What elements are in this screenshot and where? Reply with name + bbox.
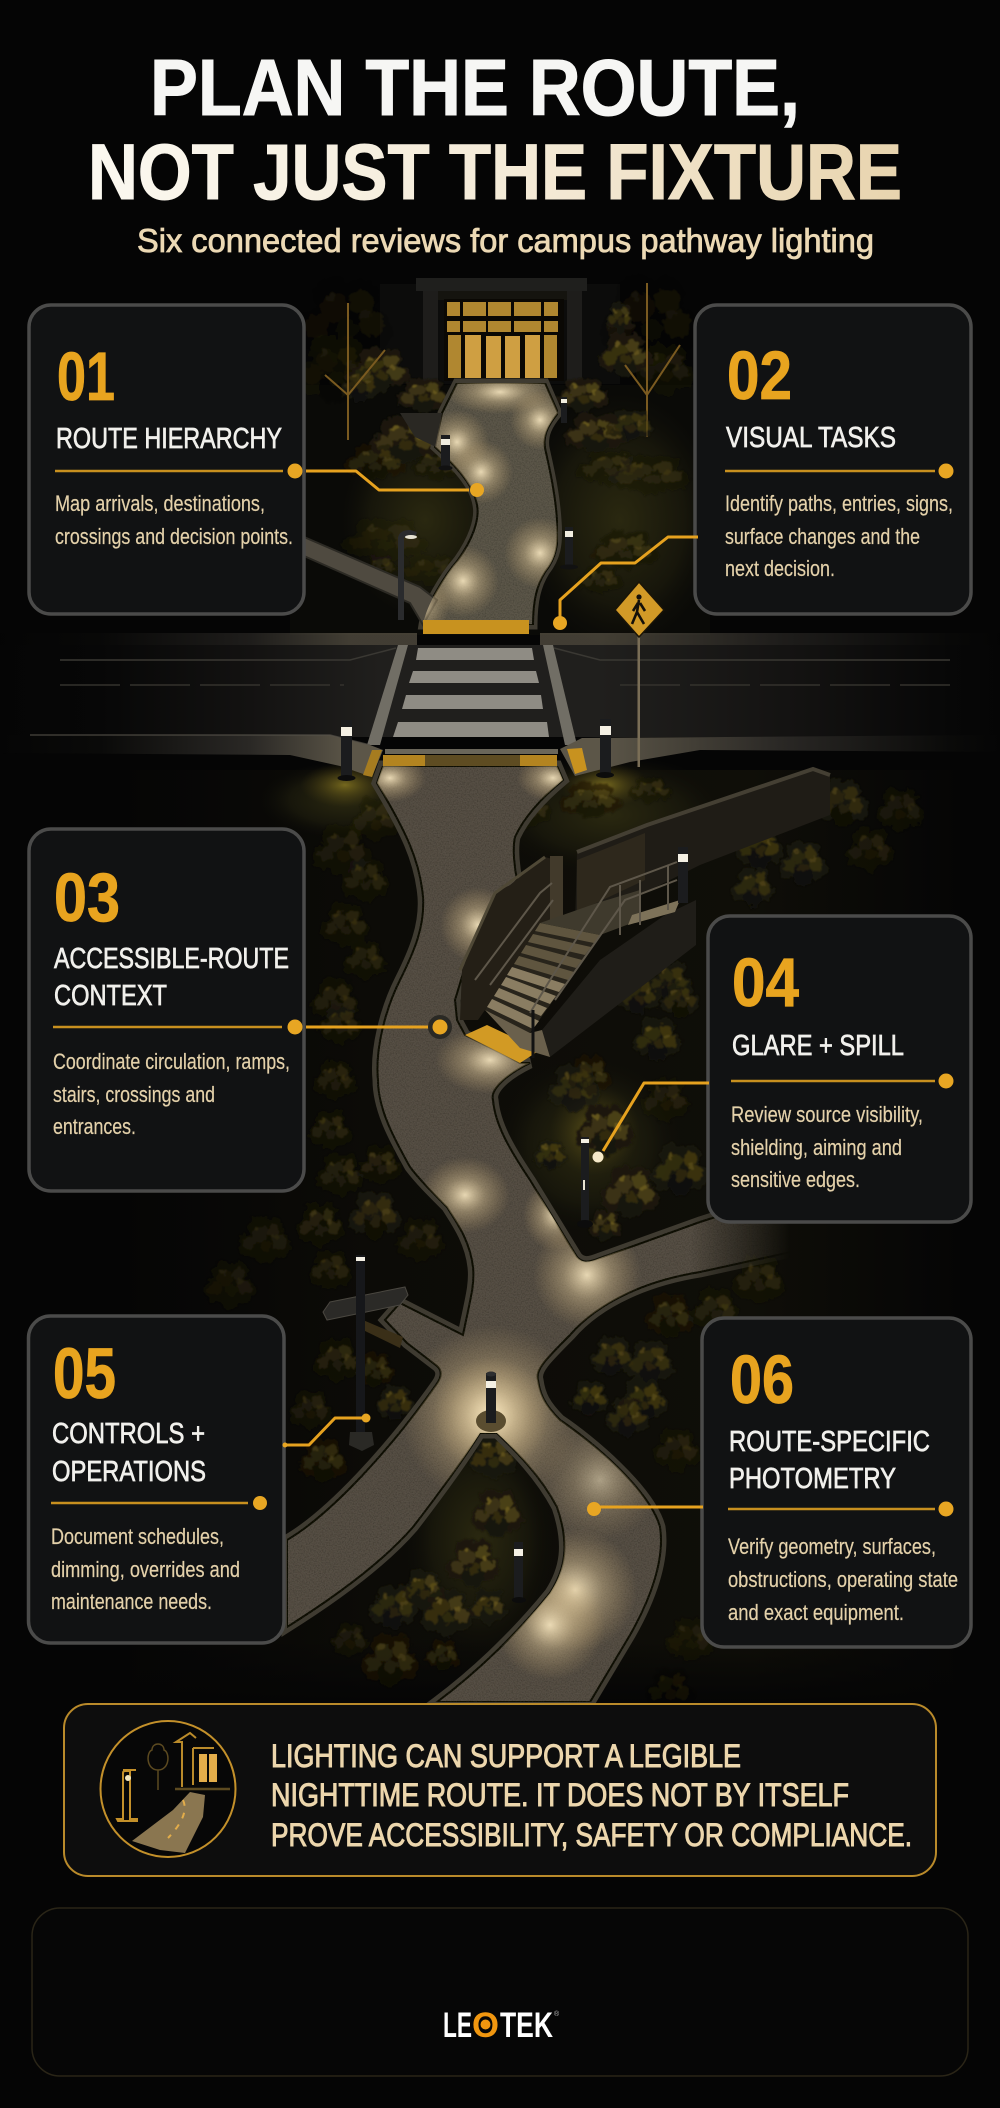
panel 01: route hierarchy: crossings and decision points.	[55, 524, 293, 549]
title: NOT JUST THE FIXTURE	[88, 127, 902, 216]
panel 02: visual tasks	[695, 305, 971, 614]
stairs, railings and retaining wall	[460, 769, 830, 1058]
connector: panel 01 to route	[306, 471, 484, 497]
panel 02: visual tasks: 02	[727, 337, 792, 414]
heading	[88, 43, 902, 259]
panel 03: accessible-route context: stairs, crossings and	[53, 1082, 215, 1107]
panel 04: glare and spill: GLARE + SPILL	[732, 1030, 904, 1062]
panel 05: controls and operations	[28, 1316, 284, 1643]
panel 06: route-specific photometry: ROUTE-SPECIFIC	[729, 1426, 930, 1458]
panel 03: accessible-route context: ACCESSIBLE-ROUTE	[54, 943, 289, 975]
panel 06: route-specific photometry: Verify geometry, surfaces,	[728, 1534, 936, 1559]
panel 03: accessible-route context: Coordinate circulation, ramps,	[53, 1049, 290, 1074]
panel 05: controls and operations: Document schedules,	[51, 1524, 224, 1549]
panel 03: accessible-route context	[29, 829, 304, 1191]
pedestrian crossing sign	[615, 582, 664, 767]
panel 06: route-specific photometry: and exact equipment.	[728, 1600, 904, 1625]
caveat statement: NIGHTTIME ROUTE. IT DOES NOT BY ITSELF	[271, 1777, 849, 1813]
connector: panel 04 to pole light	[592, 1083, 709, 1162]
connector: panel 06 to walkway	[587, 1502, 703, 1516]
panel 05: controls and operations: maintenance needs.	[51, 1589, 212, 1614]
title	[88, 43, 902, 216]
panel 02: visual tasks: VISUAL TASKS	[726, 422, 896, 454]
panel 05: controls and operations: 05	[53, 1335, 116, 1414]
caveat statement: LIGHTING CAN SUPPORT A LEGIBLE	[271, 1738, 741, 1774]
campus building	[380, 278, 620, 384]
logo: LEOTEK: O	[472, 2006, 499, 2045]
panel 03: accessible-route context: CONTEXT	[54, 980, 167, 1012]
title: PLAN THE ROUTE,	[150, 43, 800, 132]
logo: LEOTEK: ®	[554, 2010, 560, 2018]
panel 02: visual tasks: Identify paths, entries, signs,	[725, 491, 953, 516]
panel 06: route-specific photometry	[702, 1318, 971, 1647]
panel 02: visual tasks: surface changes and the	[725, 524, 920, 549]
pathway bollards and pole lights	[338, 397, 688, 1603]
street and crosswalk	[0, 633, 1000, 777]
shrubs and planting beds	[204, 377, 924, 1712]
panel 01: route hierarchy: 01	[57, 338, 115, 415]
scene: illustrated campus route at night	[0, 274, 1000, 1712]
panel 06: route-specific photometry: obstructions, operating state	[728, 1567, 958, 1592]
panel 03: accessible-route context: entrances.	[53, 1114, 136, 1139]
caveat statement	[271, 1738, 912, 1853]
panel 06: route-specific photometry: 06	[730, 1341, 794, 1418]
tactile warning surfaces	[363, 620, 587, 1063]
panel 01: route hierarchy	[29, 305, 304, 614]
panel 05: controls and operations: dimming, overrides and	[51, 1557, 240, 1582]
panel 04: glare and spill: 04	[732, 944, 799, 1021]
panel 04: glare and spill	[708, 916, 971, 1222]
panel 04: glare and spill: Review source visibility,	[731, 1102, 923, 1127]
panel 02: visual tasks: next decision.	[725, 556, 835, 581]
footer panel	[32, 1908, 968, 2076]
panel 06: route-specific photometry: PHOTOMETRY	[729, 1463, 896, 1495]
panel 03: accessible-route context: 03	[54, 859, 120, 936]
callout: lighting caveat	[64, 1704, 936, 1876]
walkway network	[287, 370, 800, 1702]
panel 04: glare and spill: shielding, aiming and	[731, 1135, 902, 1160]
connector: panel 05 to signpost	[282, 1414, 370, 1448]
logo: LEOTEK: TEK	[500, 2006, 553, 2045]
wayfinding signpost	[323, 1255, 408, 1451]
logo: LEOTEK: LE	[443, 2006, 472, 2045]
panel 05: controls and operations: OPERATIONS	[52, 1456, 206, 1488]
connector: panel 02 to crossing edge	[553, 537, 698, 630]
panel 01: route hierarchy: ROUTE HIERARCHY	[56, 423, 282, 455]
subtitle: Six connected reviews for campus pathway lighting	[137, 222, 874, 259]
panel 05: controls and operations: CONTROLS +	[52, 1418, 205, 1450]
panel 01: route hierarchy: Map arrivals, destinations,	[55, 491, 265, 516]
panel 04: glare and spill: sensitive edges.	[731, 1167, 860, 1192]
logo: LEOTEK	[443, 2006, 560, 2045]
trees	[297, 274, 700, 440]
icon: lit route to building	[100, 1721, 236, 1857]
connector: panel 03 to stairs	[306, 1015, 452, 1039]
